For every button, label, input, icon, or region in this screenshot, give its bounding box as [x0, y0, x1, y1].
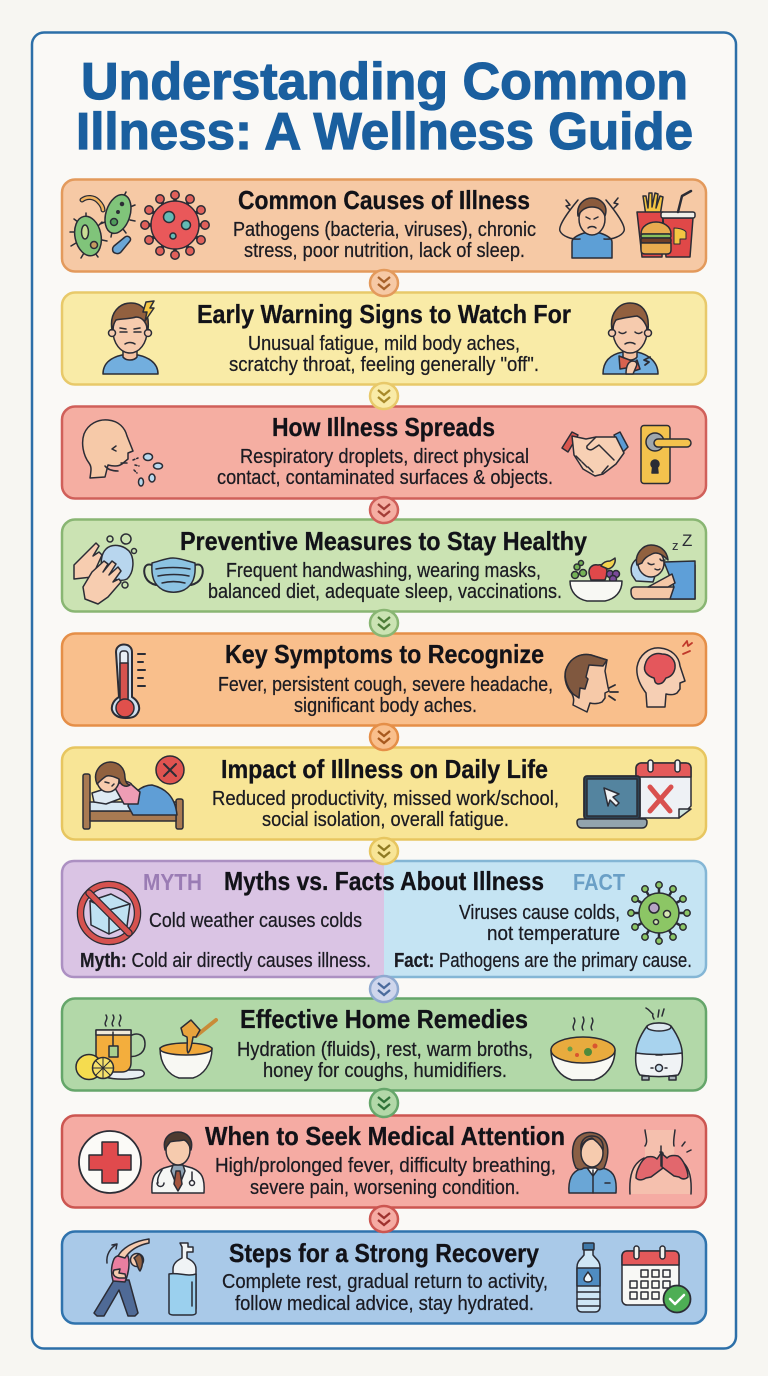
panel: preventive measures [62, 520, 706, 612]
icon: stressed person [560, 198, 624, 258]
icon: thermometer [112, 644, 145, 718]
icon: lemon tea [76, 1015, 145, 1080]
icon: headache brain [637, 641, 692, 707]
title: Understanding Common [81, 53, 688, 111]
icon: no ice cube [80, 884, 138, 942]
icon: medical cross [79, 1131, 141, 1193]
heading: medical attention: When to Seek Medical Attention [205, 1121, 565, 1151]
panel: how illness spreads [62, 406, 706, 498]
icon: virus [141, 191, 209, 259]
heading: myths vs facts: Myths vs. Facts About Illness [224, 866, 544, 896]
icon: soup bowl [551, 1017, 615, 1080]
text: myth statement: Cold weather causes colds [149, 910, 362, 932]
text: preventive measures: Frequent handwashing, wearing masks, [226, 560, 541, 582]
icon: fruit bowl [570, 558, 622, 601]
icon: tired person [103, 301, 158, 374]
title: Illness: A Wellness Guide [76, 103, 693, 161]
icon: doctor [152, 1132, 204, 1193]
text: early warning signs: Unusual fatigue, mild body aches, [248, 333, 520, 355]
text: strong recovery: follow medical advice, stay hydrated. [235, 1293, 534, 1315]
label: fact: FACT [573, 869, 625, 895]
text: common causes [233, 219, 536, 262]
icon: lungs [630, 1130, 691, 1194]
text: impact on daily life: social isolation, overall fatigue. [262, 809, 509, 831]
text: home remedies: honey for coughs, humidifiers. [263, 1060, 507, 1082]
heading: key symptoms: Key Symptoms to Recognize [225, 639, 544, 669]
icon: laptop [577, 776, 647, 828]
arrow: causes to warning signs [370, 270, 398, 296]
icon: coughing man [565, 655, 618, 712]
icon: handwashing [74, 534, 136, 604]
arrow: myths to remedies [370, 976, 398, 1002]
text: preventive measures: balanced diet, adequate sleep, vaccinations. [208, 581, 562, 603]
arrow: warning signs to spreads [370, 383, 398, 409]
text: key symptoms: Fever, persistent cough, severe headache, [218, 674, 553, 696]
text: impact on daily life: Reduced productivity, missed work/school, [212, 788, 559, 810]
icon: fast food [637, 191, 695, 257]
panel: impact on daily life [62, 748, 706, 840]
text: medical attention: severe pain, worsening condition. [250, 1177, 520, 1199]
panel: common causes [62, 180, 706, 272]
arrow: remedies to medical attention [370, 1089, 398, 1117]
text: strong recovery: Complete rest, gradual return to activity, [222, 1271, 548, 1293]
text: medical attention [215, 1155, 556, 1199]
text: home remedies: Hydration (fluids), rest, warm broths, [237, 1039, 533, 1061]
text: myth detail: Myth: Cold air directly causes illness. [80, 950, 371, 972]
panel: strong recovery [62, 1232, 706, 1324]
icon: green virus [628, 882, 690, 944]
text: impact on daily life [212, 788, 559, 831]
text: fact statement [459, 902, 620, 945]
text: early warning signs: scratchy throat, feeling generally "off". [229, 354, 539, 376]
icon: nurse [569, 1132, 616, 1193]
heading: early warning signs: Early Warning Signs to Watch For [197, 299, 571, 329]
text: common causes: Pathogens (bacteria, viruses), chronic [233, 219, 536, 241]
icon: person in bed [83, 756, 184, 829]
arrow: symptoms to impact [370, 724, 398, 750]
icon: sleeping person: z [672, 538, 678, 553]
text: key symptoms [218, 674, 553, 717]
heading: how illness spreads: How Illness Spreads [272, 412, 495, 442]
heading: common causes: Common Causes of Illness [238, 185, 530, 215]
text: strong recovery [222, 1271, 548, 1315]
icon: water bottle [577, 1243, 600, 1312]
heading: strong recovery: Steps for a Strong Recovery [229, 1238, 539, 1268]
icon: handshake [562, 432, 628, 476]
icon: sore throat person [603, 303, 658, 374]
panel: medical attention [62, 1116, 706, 1208]
icon: door handle [641, 426, 691, 484]
text: key symptoms: significant body aches. [294, 695, 477, 717]
panel: myths vs facts [62, 861, 706, 977]
icon: recovery calendar [622, 1246, 690, 1312]
text: fact detail: Fact: Pathogens are the primary cause. [394, 950, 692, 972]
arrow: prevention to symptoms [370, 610, 398, 636]
icon: honey bowl [160, 1020, 216, 1078]
text: fact statement: not temperature [487, 923, 620, 945]
heading: preventive measures: Preventive Measures to Stay Healthy [180, 526, 587, 556]
icon: missed calendar [636, 760, 691, 818]
icon: sports bottle [169, 1243, 196, 1315]
panel: key symptoms [62, 634, 706, 726]
title [76, 53, 693, 161]
icon: stretching woman [94, 1239, 149, 1316]
text: common causes: stress, poor nutrition, lack of sleep. [244, 240, 525, 262]
arrow: spreads to prevention [370, 497, 398, 523]
panel: home remedies [62, 998, 706, 1090]
panel: early warning signs [62, 292, 706, 384]
icon: sleeping person: Z [682, 531, 692, 550]
text: how illness spreads: Respiratory droplets, direct physical [240, 446, 529, 468]
arrow: medical attention to recovery [370, 1206, 398, 1232]
heading: home remedies: Effective Home Remedies [240, 1004, 528, 1034]
text: early warning signs [229, 333, 539, 376]
text: home remedies [237, 1039, 533, 1082]
text: how illness spreads [217, 446, 553, 489]
label: myth: MYTH [143, 869, 202, 895]
icon: sleeping person [631, 531, 695, 599]
text: medical attention: High/prolonged fever, difficulty breathing, [215, 1155, 556, 1177]
text: how illness spreads: contact, contaminated surfaces & objects. [217, 467, 553, 489]
text: preventive measures [208, 560, 562, 603]
icon: humidifier [636, 1008, 682, 1080]
arrow: impact to myths [370, 838, 398, 864]
text: fact statement: Viruses cause colds, [459, 902, 620, 924]
icon: bacteria [70, 191, 136, 258]
icon: sneezing head [83, 420, 162, 486]
icon: face mask [144, 558, 203, 592]
heading: impact on daily life: Impact of Illness on Daily Life [221, 754, 548, 784]
